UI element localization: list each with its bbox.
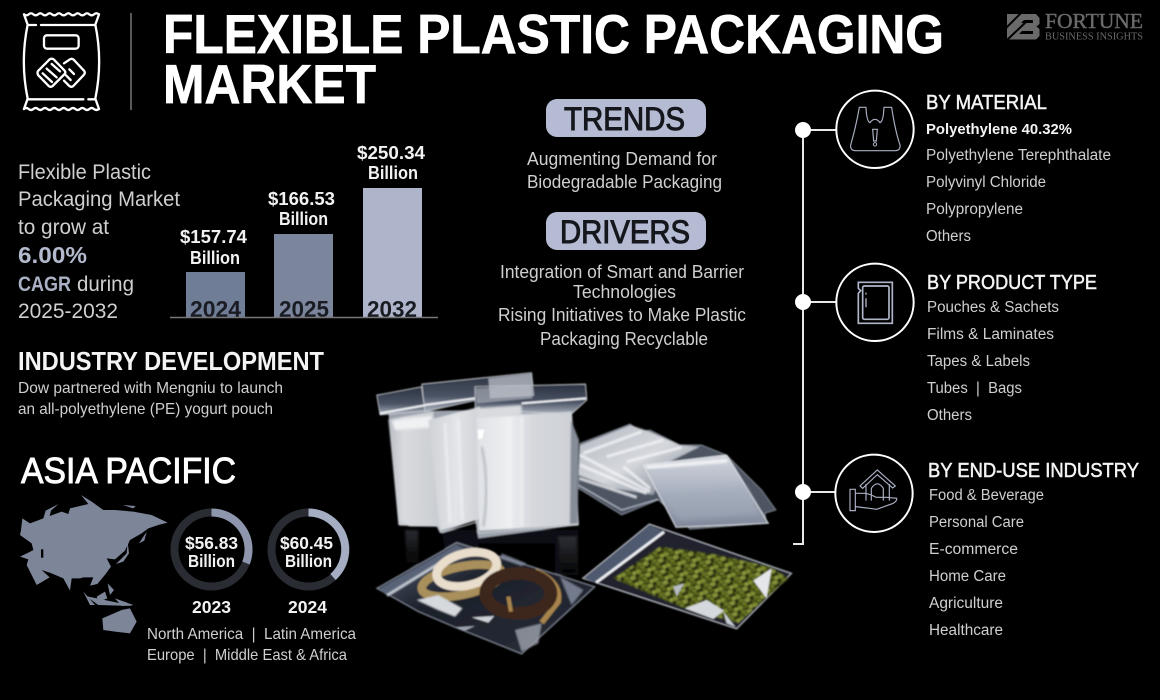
bar: 2025: Billion: [279, 209, 328, 229]
text: other regions: [147, 626, 356, 664]
icon: packaging bag: [24, 13, 99, 110]
segment: by material: Others: [926, 228, 971, 245]
bar: 2025: $166.53: [268, 189, 335, 209]
logo: Fortune Business Insights: [1006, 9, 1143, 42]
bar: 2032: [357, 143, 425, 322]
bar: 2025: [268, 189, 335, 322]
panel: trends: Augmenting Demand for: [527, 149, 717, 169]
bar: 2024: [180, 227, 247, 322]
panel: drivers: DRIVERS: [560, 214, 690, 250]
donut: 2024: Billion: [285, 551, 332, 571]
segment: by end-use industry: Food & Beverage: [929, 487, 1044, 504]
donut: 2023: 2023: [192, 597, 231, 617]
text: market growth summary: to grow at: [18, 216, 109, 239]
zip headers: [377, 373, 587, 415]
panel: drivers: Rising Initiatives to Make Plastic: [498, 305, 746, 325]
text: industry development detail: an all-polyethylene (PE) yogurt pouch: [18, 401, 273, 418]
standing bags: [377, 373, 587, 538]
segment: by end-use industry: Personal Care: [929, 514, 1024, 531]
bar: 2032: $250.34: [357, 143, 425, 163]
segment: by product type: Films & Laminates: [927, 326, 1054, 343]
text: market growth summary: CAGR: [18, 273, 71, 296]
title: [163, 3, 944, 115]
icon: house in hand: [835, 455, 913, 532]
logo: Fortune Business Insights: BUSINESS INSIGHTS: [1045, 32, 1143, 42]
bar: 2024: 2024: [190, 296, 241, 322]
panel: drivers: Packaging Recyclable: [540, 329, 708, 349]
text: industry development detail: Dow partnered with Mengniu to launch: [18, 380, 283, 397]
bar: 2032: 2032: [367, 296, 417, 322]
donut: 2024: 2024: [288, 597, 327, 617]
title: FLEXIBLE PLASTIC PACKAGING: [163, 3, 944, 65]
panel: drivers: Integration of Smart and Barrier: [500, 262, 744, 282]
segment: by end-use industry: BY END-USE INDUSTRY: [928, 460, 1139, 482]
segment: by material: Polyethylene 40.32%: [926, 121, 1072, 138]
text: other regions: Europe | Middle East & Africa: [147, 647, 347, 664]
panel: trends: Biodegradable Packaging: [527, 172, 722, 192]
segment: by product type: Tubes | Bags: [927, 380, 1022, 397]
donut: 2023: $56.83: [185, 533, 238, 553]
segment: by material: [926, 92, 1111, 245]
text: market growth summary: 6.00%: [18, 242, 87, 268]
bar: 2025: 2025: [279, 296, 329, 322]
donut: 2023: Billion: [188, 551, 235, 571]
icon: pouch: [836, 264, 914, 341]
segment: by product type: Pouches & Sachets: [927, 299, 1059, 316]
bag with green beans: [583, 524, 792, 629]
segment: by end-use industry: E-commerce: [929, 541, 1018, 558]
bag bodies: [388, 412, 440, 527]
segment: by end-use industry: [928, 460, 1139, 639]
bag with hair ties: [377, 543, 595, 654]
donut: 2024: $60.45: [280, 533, 333, 553]
bar chart: market size: [170, 143, 438, 322]
segment: by product type: [927, 272, 1097, 424]
logo: Fortune Business Insights: FORTUNE: [1045, 9, 1143, 33]
donut: 2024: [272, 512, 346, 617]
text: market growth summary: Flexible Plastic: [18, 161, 151, 184]
text: market growth summary: 2025-2032: [18, 300, 118, 323]
illustration: plastic zip bags: [377, 373, 792, 654]
segment: by end-use industry: Agriculture: [929, 595, 1003, 612]
segment: by product type: Others: [927, 407, 972, 424]
text: market growth summary: Packaging Market: [18, 188, 180, 211]
divider: [130, 13, 132, 110]
text: market growth summary: during: [77, 273, 134, 296]
panel: drivers: Technologies: [573, 282, 676, 302]
heading: Asia Pacific: ASIA PACIFIC: [21, 450, 236, 491]
panel: drivers: [498, 212, 746, 349]
segment: by material: Polyvinyl Chloride: [926, 174, 1046, 191]
map: Asia Pacific: [20, 495, 168, 633]
bar: 2024: $157.74: [180, 227, 247, 247]
bar: 2032: Billion: [368, 163, 418, 183]
heading: industry development: INDUSTRY DEVELOPMENT: [18, 346, 324, 376]
title: MARKET: [163, 53, 376, 115]
segment: by product type: Tapes & Labels: [927, 353, 1030, 370]
segment: by material: BY MATERIAL: [926, 92, 1047, 114]
icon: plastic bag warning: [836, 91, 914, 168]
panel: trends: TRENDS: [564, 101, 685, 137]
segment: by material: Polypropylene: [926, 201, 1023, 218]
timeline: segment connector: [793, 122, 836, 544]
bar: 2024: Billion: [190, 248, 240, 268]
segment: by end-use industry: Healthcare: [929, 622, 1003, 639]
panel: trends: [527, 99, 722, 192]
segment: by material: Polyethylene Terephthalate: [926, 147, 1111, 164]
donut: 2023: [174, 512, 249, 617]
segment: by end-use industry: Home Care: [929, 568, 1006, 585]
flat stack of bags: [578, 424, 776, 529]
text: market growth summary: [18, 161, 180, 323]
segment: by product type: BY PRODUCT TYPE: [927, 272, 1097, 294]
text: industry development detail: [18, 380, 283, 418]
text: other regions: North America | Latin America: [147, 626, 356, 643]
reflection of standing bags: [405, 530, 578, 575]
